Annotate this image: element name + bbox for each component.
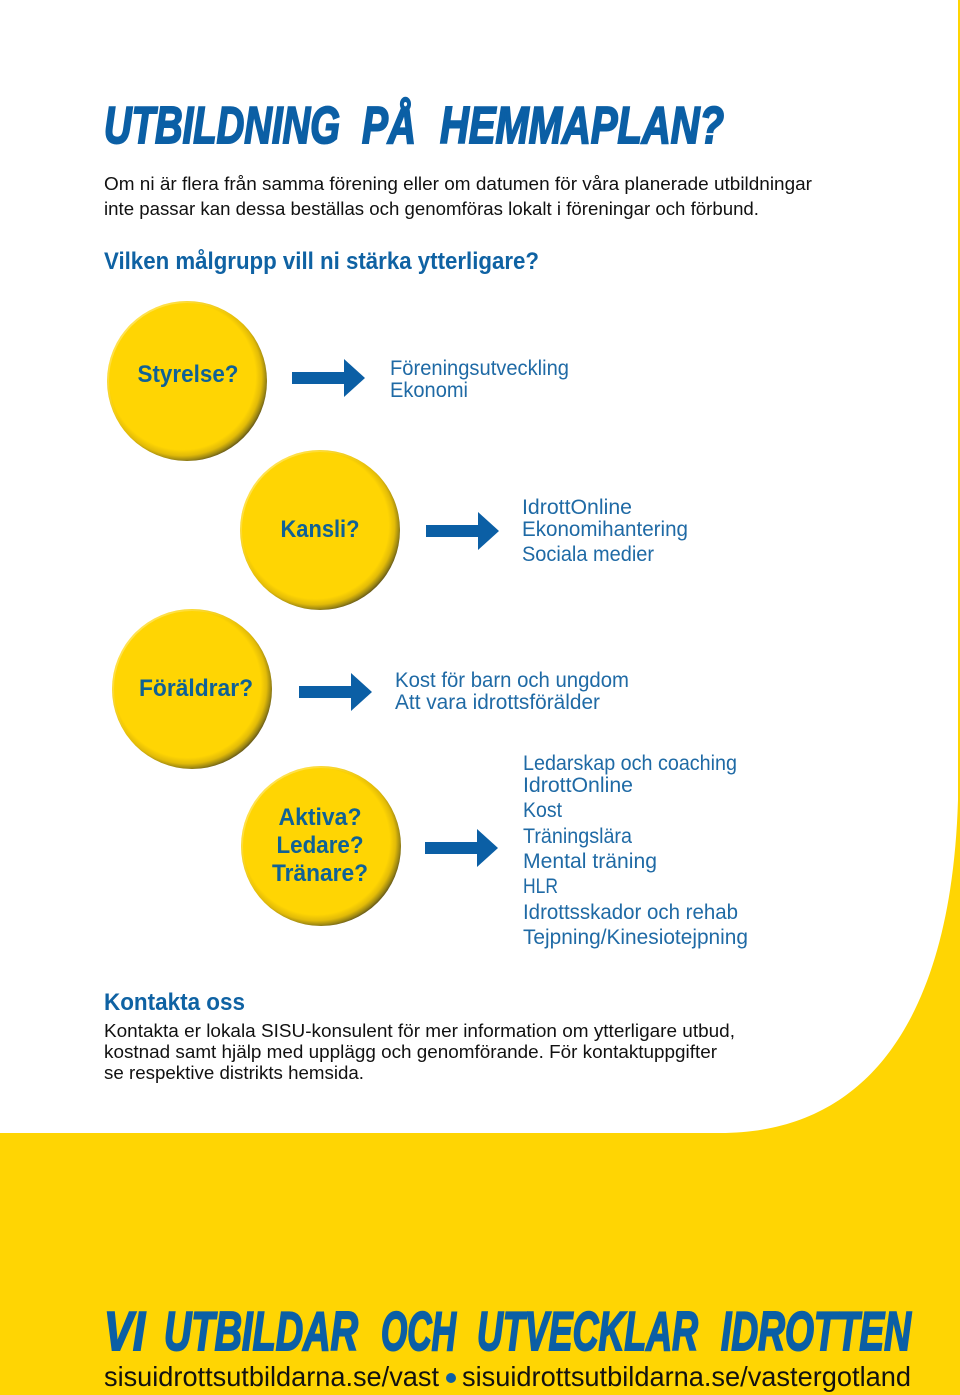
circle: Styrelse: Styrelse? xyxy=(138,361,238,388)
icon: bullet xyxy=(446,1373,456,1383)
circle: Aktiva, Ledare, Tränare: Ledare? xyxy=(276,832,364,859)
website links: sisuidrottsutbildarna.se/vastergotland xyxy=(462,1361,911,1392)
title: PÅ xyxy=(362,97,416,155)
group: Föräldrar xyxy=(112,609,629,769)
circle: Kansli xyxy=(240,450,400,610)
slogan: VI xyxy=(104,1300,146,1362)
course list: Sociala medier xyxy=(522,543,654,566)
group: Styrelse xyxy=(107,301,569,461)
heading: contact: Kontakta oss xyxy=(104,989,245,1016)
course list: IdrottOnline xyxy=(523,774,633,797)
course list: Föreningsutveckling xyxy=(390,357,569,380)
group: Aktiva, Ledare, Tränare xyxy=(241,752,748,949)
course list xyxy=(395,669,629,714)
course list: Att vara idrottsförälder xyxy=(395,691,600,714)
arrow xyxy=(299,673,372,711)
circle: Föräldrar xyxy=(112,609,272,769)
heading: target group question: Vilken målgrupp vill ni stärka ytterligare? xyxy=(104,248,539,275)
circle: Föräldrar: Föräldrar? xyxy=(139,675,253,702)
course list: Ekonomi xyxy=(390,379,468,402)
group: Kansli xyxy=(240,450,688,610)
course list: Kost xyxy=(523,799,562,822)
contact text: se respektive distrikts hemsida. xyxy=(104,1063,364,1083)
circle: Kansli: Kansli? xyxy=(280,516,360,543)
contact text: Kontakta er lokala SISU-konsulent för mer information om ytterligare utbud, xyxy=(104,1021,735,1041)
course list: Idrottsskador och rehab xyxy=(523,901,738,924)
circle: Aktiva, Ledare, Tränare: Tränare? xyxy=(272,860,368,887)
course list: IdrottOnline xyxy=(522,496,632,519)
intro text xyxy=(104,173,812,219)
course list: Ledarskap och coaching xyxy=(523,752,737,775)
title: UTBILDNING xyxy=(104,97,340,155)
slogan: UTVECKLAR xyxy=(477,1300,698,1362)
course list: Mental träning xyxy=(523,850,657,873)
arrow xyxy=(426,512,499,550)
course list: Kost för barn och ungdom xyxy=(395,669,629,692)
slogan xyxy=(104,1300,912,1362)
slogan: OCH xyxy=(381,1300,457,1362)
course list: Träningslära xyxy=(523,825,632,848)
intro text: inte passar kan dessa beställas och genomföras lokalt i föreningar och förbund. xyxy=(104,198,759,219)
course list xyxy=(523,752,748,949)
course list: Tejpning/Kinesiotejpning xyxy=(523,926,748,949)
arrow xyxy=(425,829,498,867)
circle: Aktiva, Ledare, Tränare: Aktiva? xyxy=(278,804,362,831)
title: HEMMAPLAN? xyxy=(440,97,724,155)
website links xyxy=(104,1361,911,1392)
website links: sisuidrottsutbildarna.se/vast xyxy=(104,1361,439,1392)
course list: HLR xyxy=(523,875,558,898)
intro text: Om ni är flera från samma förening eller om datumen för våra planerade utbildningar xyxy=(104,173,812,194)
circle: Styrelse xyxy=(107,301,267,461)
course list: Ekonomihantering xyxy=(522,518,688,541)
course list xyxy=(390,357,569,402)
contact text xyxy=(104,1021,735,1083)
circle: Aktiva, Ledare, Tränare xyxy=(241,766,401,926)
title xyxy=(104,97,724,155)
course list xyxy=(522,496,688,566)
arrow xyxy=(292,359,365,397)
contact text: kostnad samt hjälp med upplägg och genomförande. För kontaktuppgifter xyxy=(104,1042,717,1062)
slogan: UTBILDAR xyxy=(164,1300,358,1362)
